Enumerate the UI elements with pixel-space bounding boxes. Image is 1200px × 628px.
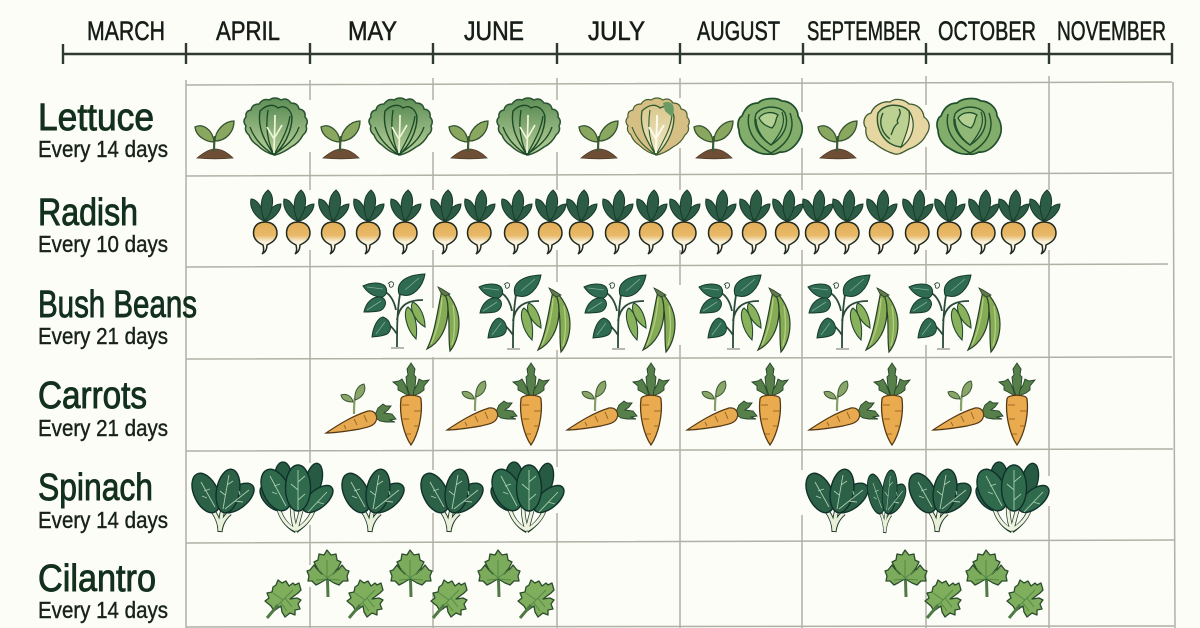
- row: cilantro: [38, 550, 1043, 623]
- label: carrots: Carrots: [38, 375, 147, 417]
- month labels: [87, 16, 1166, 46]
- label: spinach: [38, 467, 168, 533]
- row: lettuce: [38, 97, 1001, 162]
- label: lettuce: Lettuce: [38, 97, 154, 139]
- label: carrots: Every 21 days: [38, 415, 168, 441]
- month labels: JUNE: [464, 16, 524, 46]
- gaps in grid lines behind icons: [306, 98, 1053, 593]
- month labels: OCTOBER: [938, 16, 1036, 46]
- label: cilantro: [38, 558, 168, 623]
- month labels: AUGUST: [697, 16, 780, 46]
- bean icons: [363, 274, 1000, 352]
- label: radish: [38, 192, 168, 257]
- label: carrots: [38, 375, 168, 441]
- grid lines: [186, 76, 1175, 628]
- month labels: JULY: [588, 16, 645, 46]
- radish icons: [251, 190, 1060, 254]
- carrot icons: [326, 363, 1035, 445]
- label: spinach: Spinach: [38, 467, 153, 509]
- label: radish: Radish: [38, 192, 138, 234]
- row: radish: [38, 190, 1060, 257]
- row: carrots: [38, 363, 1035, 445]
- axis line: [63, 43, 1172, 64]
- label: bush beans: [38, 284, 197, 349]
- label: radish: Every 10 days: [38, 231, 168, 257]
- spinach icons: [186, 462, 1054, 533]
- row: bush beans: [38, 274, 1000, 352]
- month labels: SEPTEMBER: [807, 16, 921, 46]
- label: lettuce: Every 14 days: [38, 136, 168, 162]
- label: cilantro: Cilantro: [38, 558, 156, 600]
- label: cilantro: Every 14 days: [38, 597, 168, 623]
- label: lettuce: [38, 97, 168, 162]
- label: bush beans: Every 21 days: [38, 323, 168, 349]
- month labels: MAY: [348, 16, 397, 46]
- label: bush beans: Bush Beans: [38, 284, 197, 326]
- month labels: APRIL: [216, 16, 280, 46]
- month labels: MARCH: [87, 16, 165, 46]
- cilantro icons: [265, 550, 1043, 618]
- row: spinach: [38, 462, 1054, 533]
- month timeline: [63, 16, 1172, 64]
- lettuce icons: [195, 98, 1001, 159]
- label: spinach: Every 14 days: [38, 507, 168, 533]
